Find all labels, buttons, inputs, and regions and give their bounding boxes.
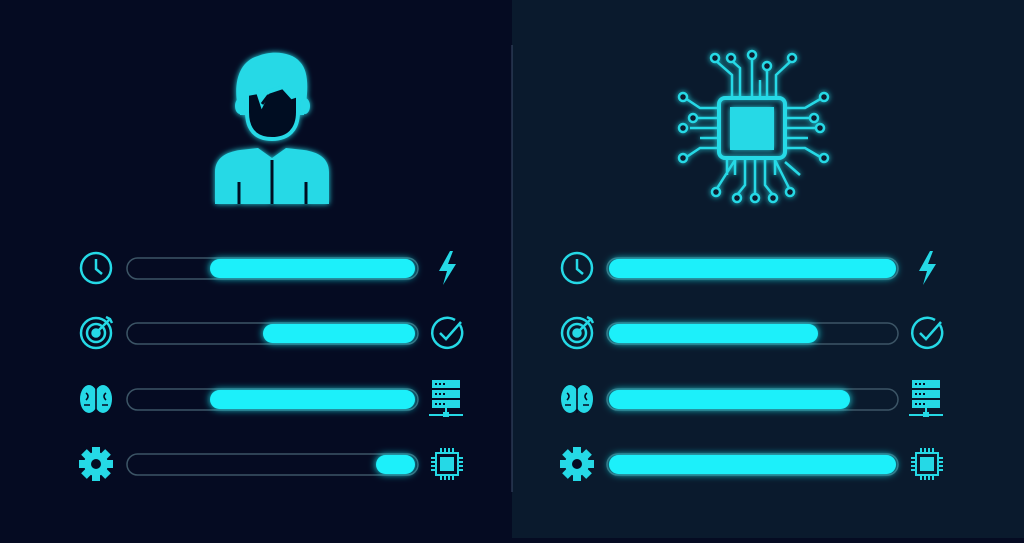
icon: human person [215,53,329,204]
icon: AI chip [679,51,828,202]
chart: AI bars [607,258,898,475]
icons: left row markers [79,251,463,481]
panel: right background [512,0,1024,538]
icons: right row markers [560,251,943,481]
divider [511,45,513,492]
chart: human bars [127,258,418,475]
